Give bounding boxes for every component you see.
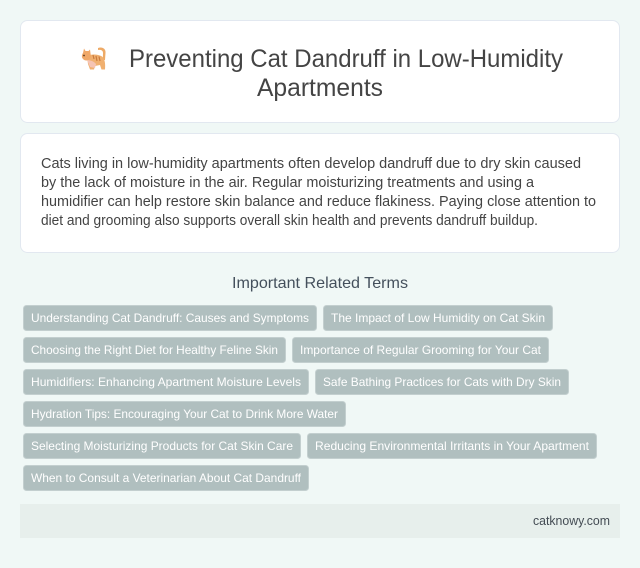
title: Preventing Cat Dandruff in Low-Humidity <box>129 45 563 73</box>
text block: summary <box>41 156 596 229</box>
text block: summary: humidifier can help restore skin balance and reduce flakiness. Paying close attention to <box>41 194 596 210</box>
tag: causes and symptoms <box>24 306 316 330</box>
tag: irritants <box>308 434 596 458</box>
panel: summary text <box>20 134 620 252</box>
text block: summary: diet and grooming also supports overall skin health and prevents dandruff buildup. <box>41 213 538 229</box>
tag: hydration <box>24 402 346 426</box>
heading: related terms: Important Related Terms <box>232 275 408 292</box>
text block: summary: by the lack of moisture in the air. Regular moisturizing treatments and using a <box>41 175 535 191</box>
tag: diet: Choosing the Right Diet for Healthy Feline Skin <box>31 343 278 357</box>
tag: irritants: Reducing Environmental Irritants in Your Apartment <box>315 439 590 453</box>
title: Apartments <box>257 74 383 102</box>
tag: hydration: Hydration Tips: Encouraging Your Cat to Drink More Water <box>31 407 338 421</box>
tag: humidifiers: Humidifiers: Enhancing Apartment Moisture Levels <box>31 375 301 389</box>
text block: summary: Cats living in low-humidity apartments often develop dandruff due to dry skin caused <box>41 156 581 172</box>
icon: cat <box>82 48 106 70</box>
tag: moisturizing products <box>24 434 300 458</box>
panel: title card <box>20 20 620 122</box>
tag: impact of low humidity: The Impact of Low Humidity on Cat Skin <box>331 311 545 325</box>
tag: veterinarian: When to Consult a Veterinarian About Cat Dandruff <box>31 471 302 485</box>
tag: grooming <box>292 338 548 362</box>
panel: related term tags <box>24 306 596 490</box>
tag: grooming: Importance of Regular Grooming for Your Cat <box>300 343 542 357</box>
title <box>129 45 563 102</box>
footer: catknowy.com <box>533 514 610 528</box>
tag: humidifiers <box>24 370 308 394</box>
tag: bathing <box>316 370 568 394</box>
tag: diet <box>24 338 286 362</box>
tag: causes and symptoms: Understanding Cat Dandruff: Causes and Symptoms <box>31 311 309 325</box>
footer <box>20 504 620 538</box>
tag: veterinarian <box>24 466 308 490</box>
tag: moisturizing products: Selecting Moisturizing Products for Cat Skin Care <box>31 439 293 453</box>
tag: impact of low humidity <box>324 306 552 330</box>
tag: bathing: Safe Bathing Practices for Cats with Dry Skin <box>323 375 561 389</box>
